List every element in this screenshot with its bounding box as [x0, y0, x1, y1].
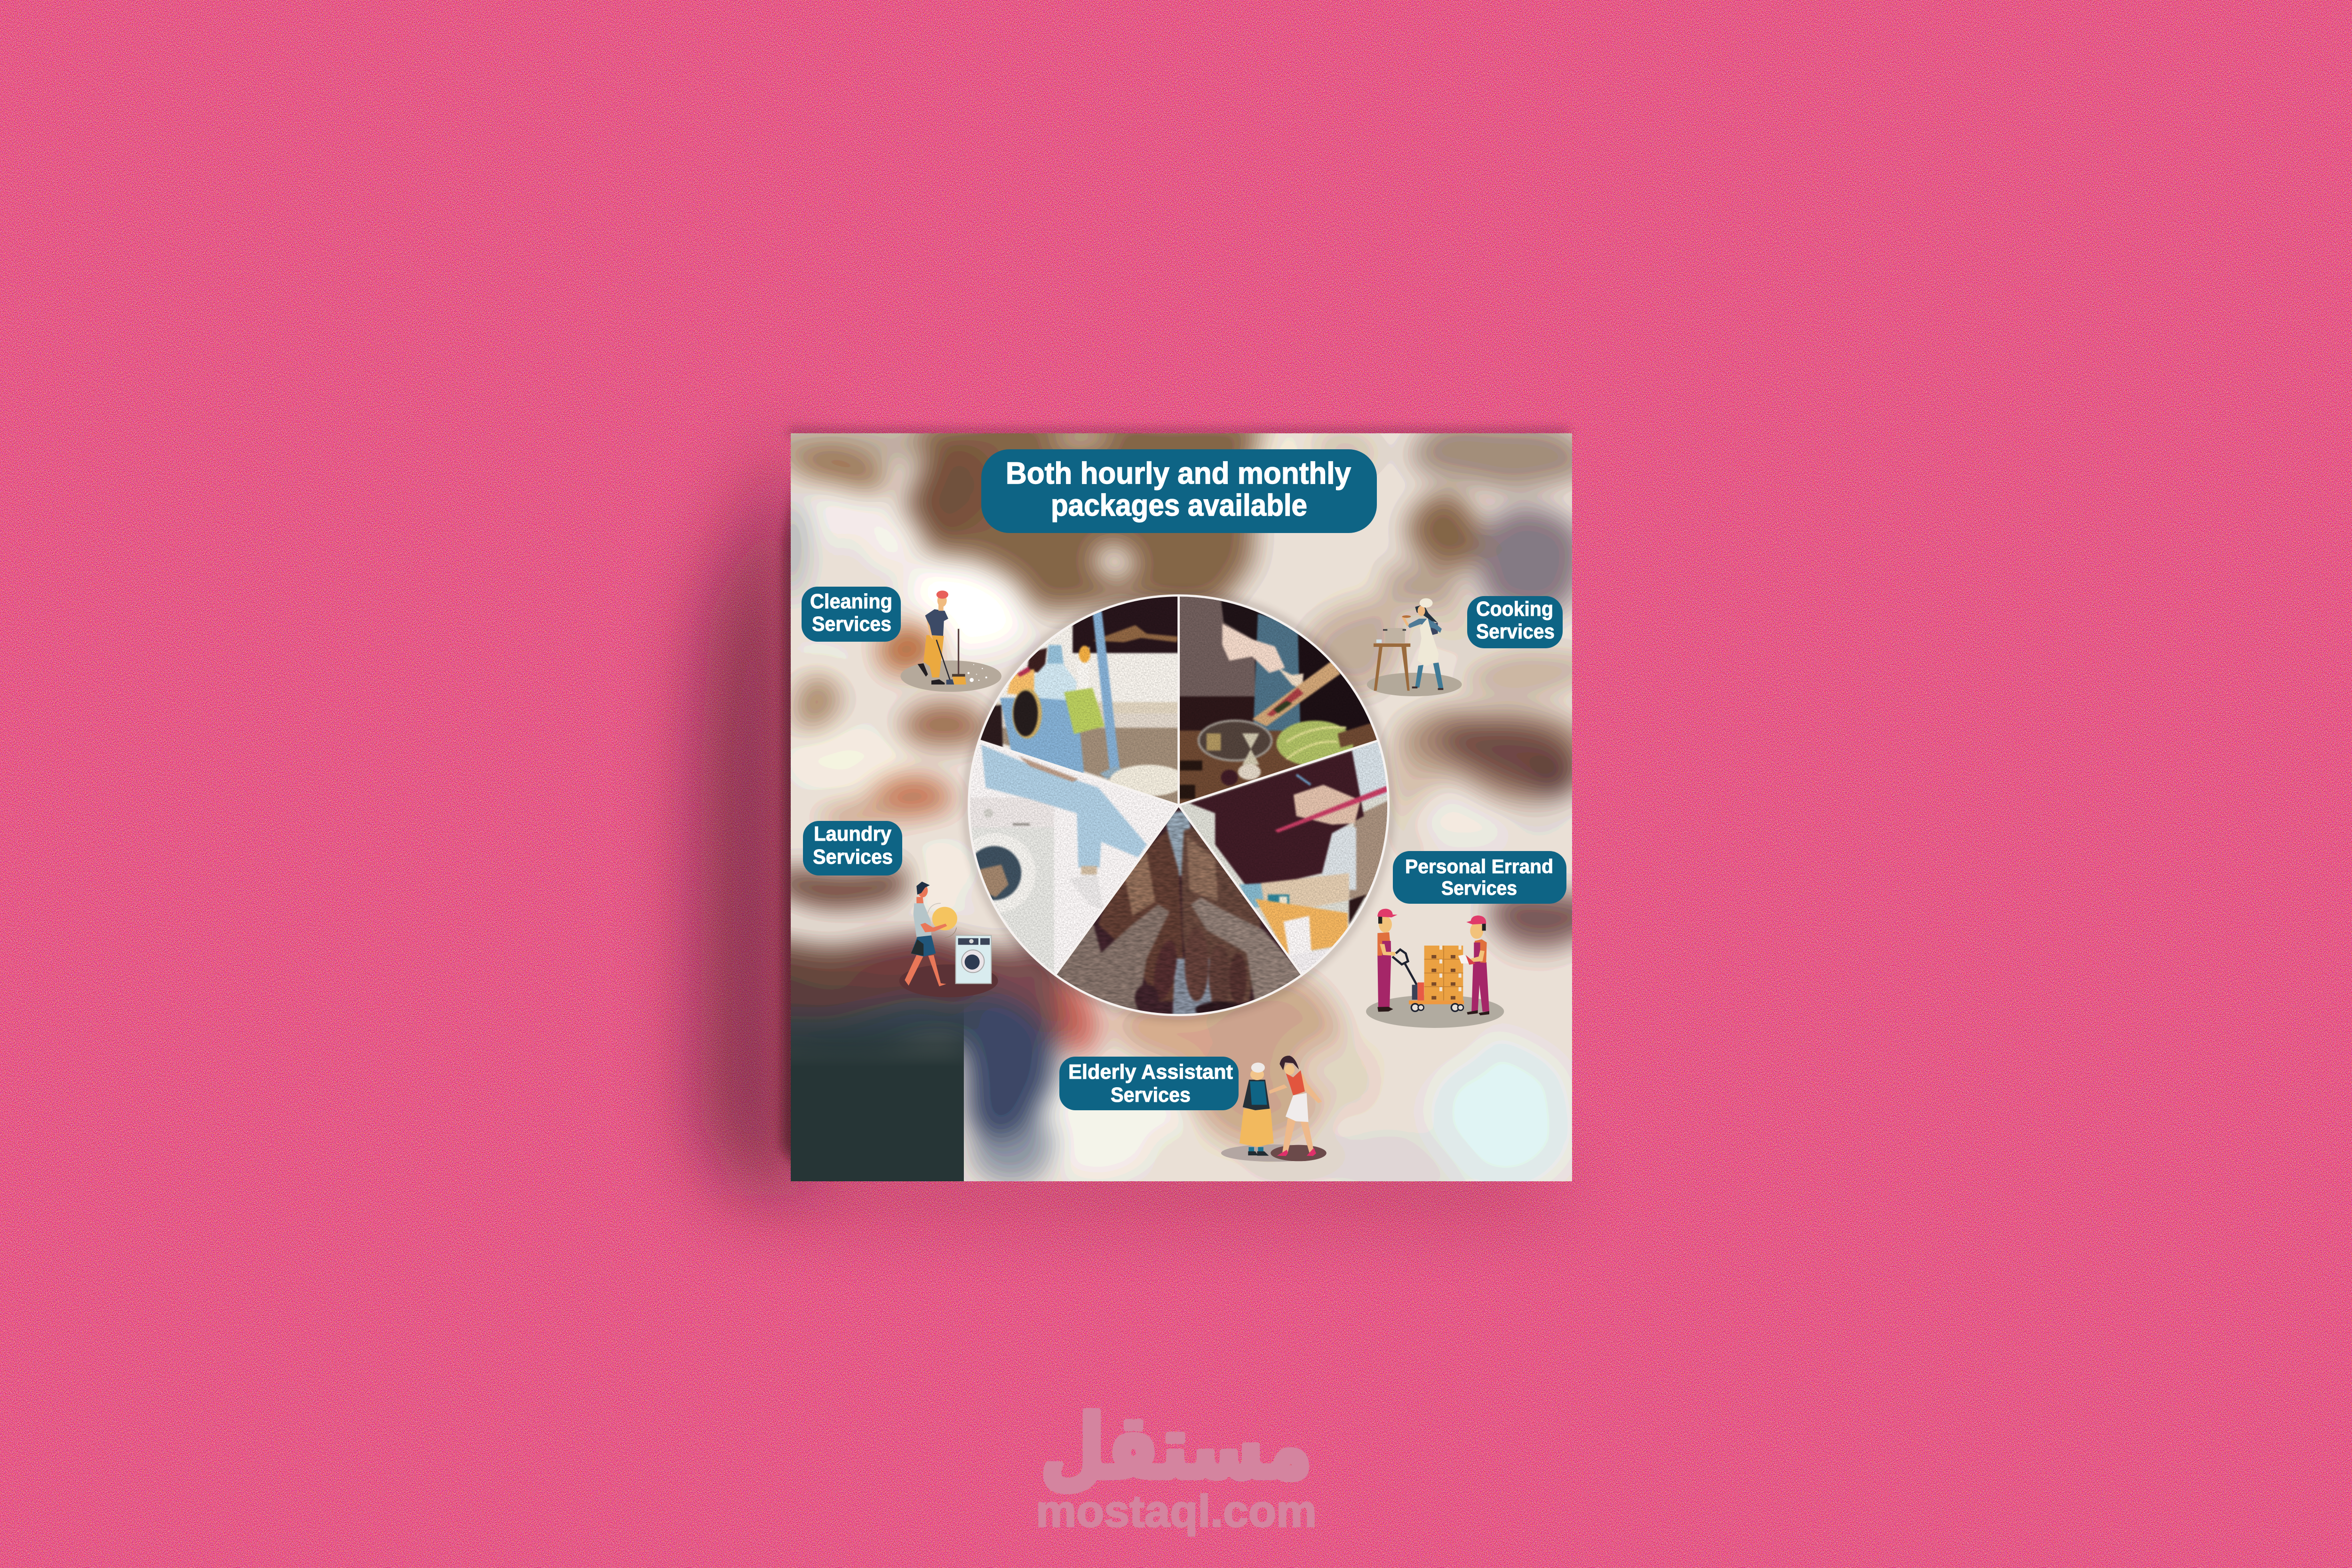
- photo slice: laundry: [956, 731, 1192, 987]
- illustration: delivery workers with boxes: [1366, 909, 1504, 1028]
- label: laundry services: Services: [813, 845, 893, 868]
- label: cleaning services: Cleaning: [810, 590, 892, 613]
- illustration: laundry person and washer: [899, 882, 998, 997]
- label: cooking services: Cooking: [1476, 597, 1553, 621]
- label: cleaning services: [802, 587, 901, 642]
- label: personal errand services: Personal Errand: [1405, 855, 1553, 877]
- label: personal errand services: [1393, 851, 1566, 904]
- photo slice: cooking: [1175, 588, 1392, 816]
- title text: [1006, 456, 1351, 522]
- label: laundry services: [803, 821, 902, 876]
- photo slice: personal errand: [1175, 725, 1403, 987]
- watermark logo: mostaql.com: [1036, 1486, 1317, 1536]
- label: cooking services: [1467, 596, 1563, 648]
- title text: Both hourly and monthly: [1006, 456, 1351, 490]
- label: cleaning services: Services: [812, 613, 891, 636]
- pie white outline and dividers: [969, 596, 1389, 1015]
- title pill: [981, 449, 1377, 533]
- label: elderly assistant services: Elderly Assistant: [1068, 1060, 1233, 1083]
- label: elderly assistant services: Services: [1111, 1083, 1191, 1106]
- illustration: cleaning worker: [900, 590, 1001, 692]
- label: elderly assistant services: [1059, 1057, 1239, 1110]
- circular pie of service photos: [956, 588, 1403, 1021]
- label: cooking services: Services: [1476, 620, 1555, 643]
- photo slice: elderly assistance: [1050, 799, 1306, 1021]
- label: personal errand services: Services: [1441, 877, 1517, 899]
- title text: packages available: [1051, 488, 1307, 522]
- illustration: elderly woman and helper: [1221, 1056, 1327, 1162]
- photo slice: cleaning: [980, 597, 1178, 804]
- watermark logo: مستقل: [1041, 1396, 1312, 1498]
- illustration: cooking chef: [1367, 598, 1462, 696]
- label: laundry services: Laundry: [814, 822, 891, 845]
- card: blurred photographic background: [791, 433, 1572, 1181]
- watermark logo: [1036, 1396, 1317, 1536]
- card drop shadow: [701, 429, 1569, 1195]
